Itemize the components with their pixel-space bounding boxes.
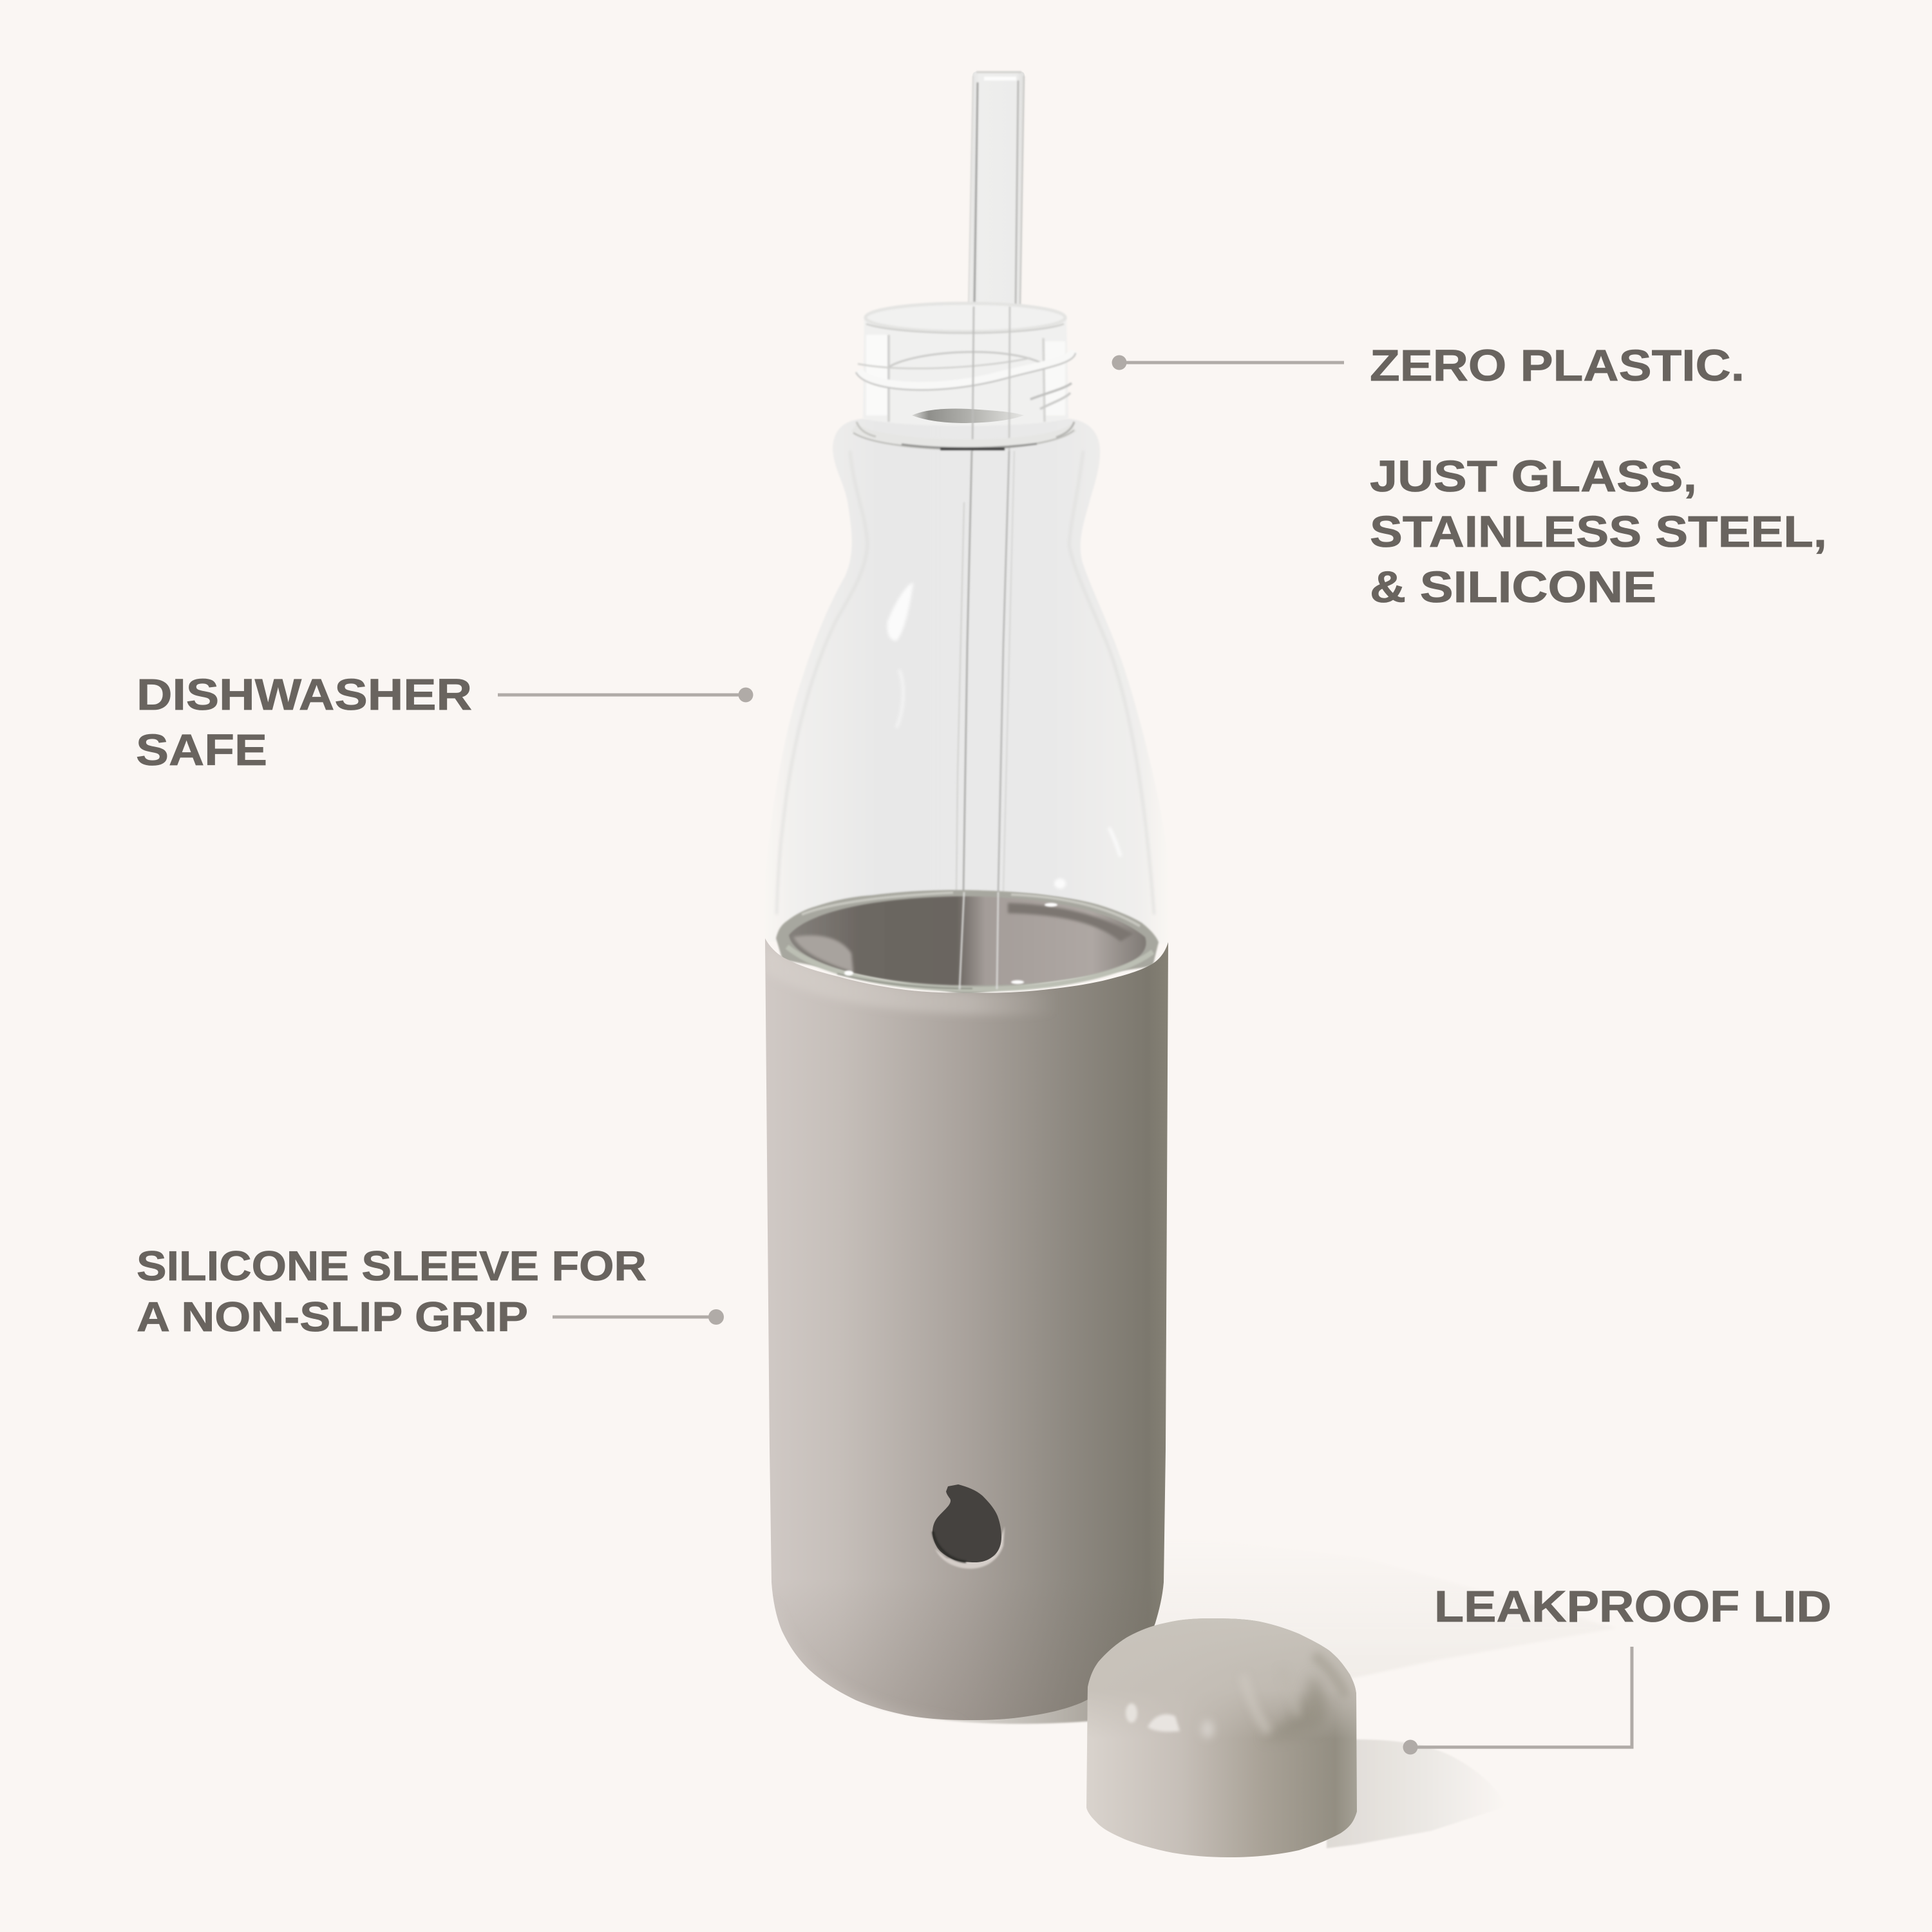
text: dishwasher safe: SAFE [136,725,267,775]
silicone sleeve [760,938,1172,1726]
text: zero plastic: JUST GLASS, [1370,451,1697,501]
text: zero plastic: & SILICONE [1370,562,1656,612]
lid highlights [1126,1703,1137,1723]
collar ring at the shoulder [853,422,1074,449]
mouth reflection [912,409,1024,423]
leader line: zero plastic [1112,355,1344,370]
glass highlight left [887,583,913,641]
text: silicone sleeve [137,1242,647,1340]
text: dishwasher safe: DISHWASHER [137,670,472,719]
text: zero plastic: STAINLESS STEEL, [1370,507,1827,556]
leader line: dishwasher safe [498,688,753,702]
lighter pocket on the left [793,935,853,972]
leakproof lid [1082,1616,1359,1861]
leader line: silicone sleeve [553,1309,724,1325]
text: leakproof lid: LEAKPROOF LID [1434,1582,1832,1631]
shadow right of the lid [1327,1739,1507,1848]
shadow cast behind the bottle [1146,1533,1616,1707]
text: zero plastic [1370,341,1827,612]
glass base seen through the bottle [776,878,1159,995]
text: dishwasher safe [136,670,472,775]
leader line: leakproof lid [1403,1647,1632,1754]
text: silicone sleeve: SILICONE SLEEVE FOR [137,1242,647,1289]
glass bottle body [764,419,1168,944]
callout: leakproof lid [1403,1582,1832,1754]
callout: dishwasher safe [136,670,753,775]
bottle and lid product illustration [765,71,1463,1857]
text: zero plastic: ZERO PLASTIC. [1370,341,1745,390]
dark band along the back of the base [1008,903,1133,942]
shadow under the bottle [857,1690,1095,1724]
callout: zero plastic [1112,341,1827,612]
glass highlight right [1109,828,1121,857]
text: silicone sleeve: A NON-SLIP GRIP [137,1293,528,1340]
callout: silicone sleeve [137,1242,724,1340]
glass straw inside the bottle [956,307,1014,892]
glass straw upper section [968,71,1025,307]
logo drop cut-out [933,1484,1005,1569]
glass neck with thread [856,303,1075,426]
